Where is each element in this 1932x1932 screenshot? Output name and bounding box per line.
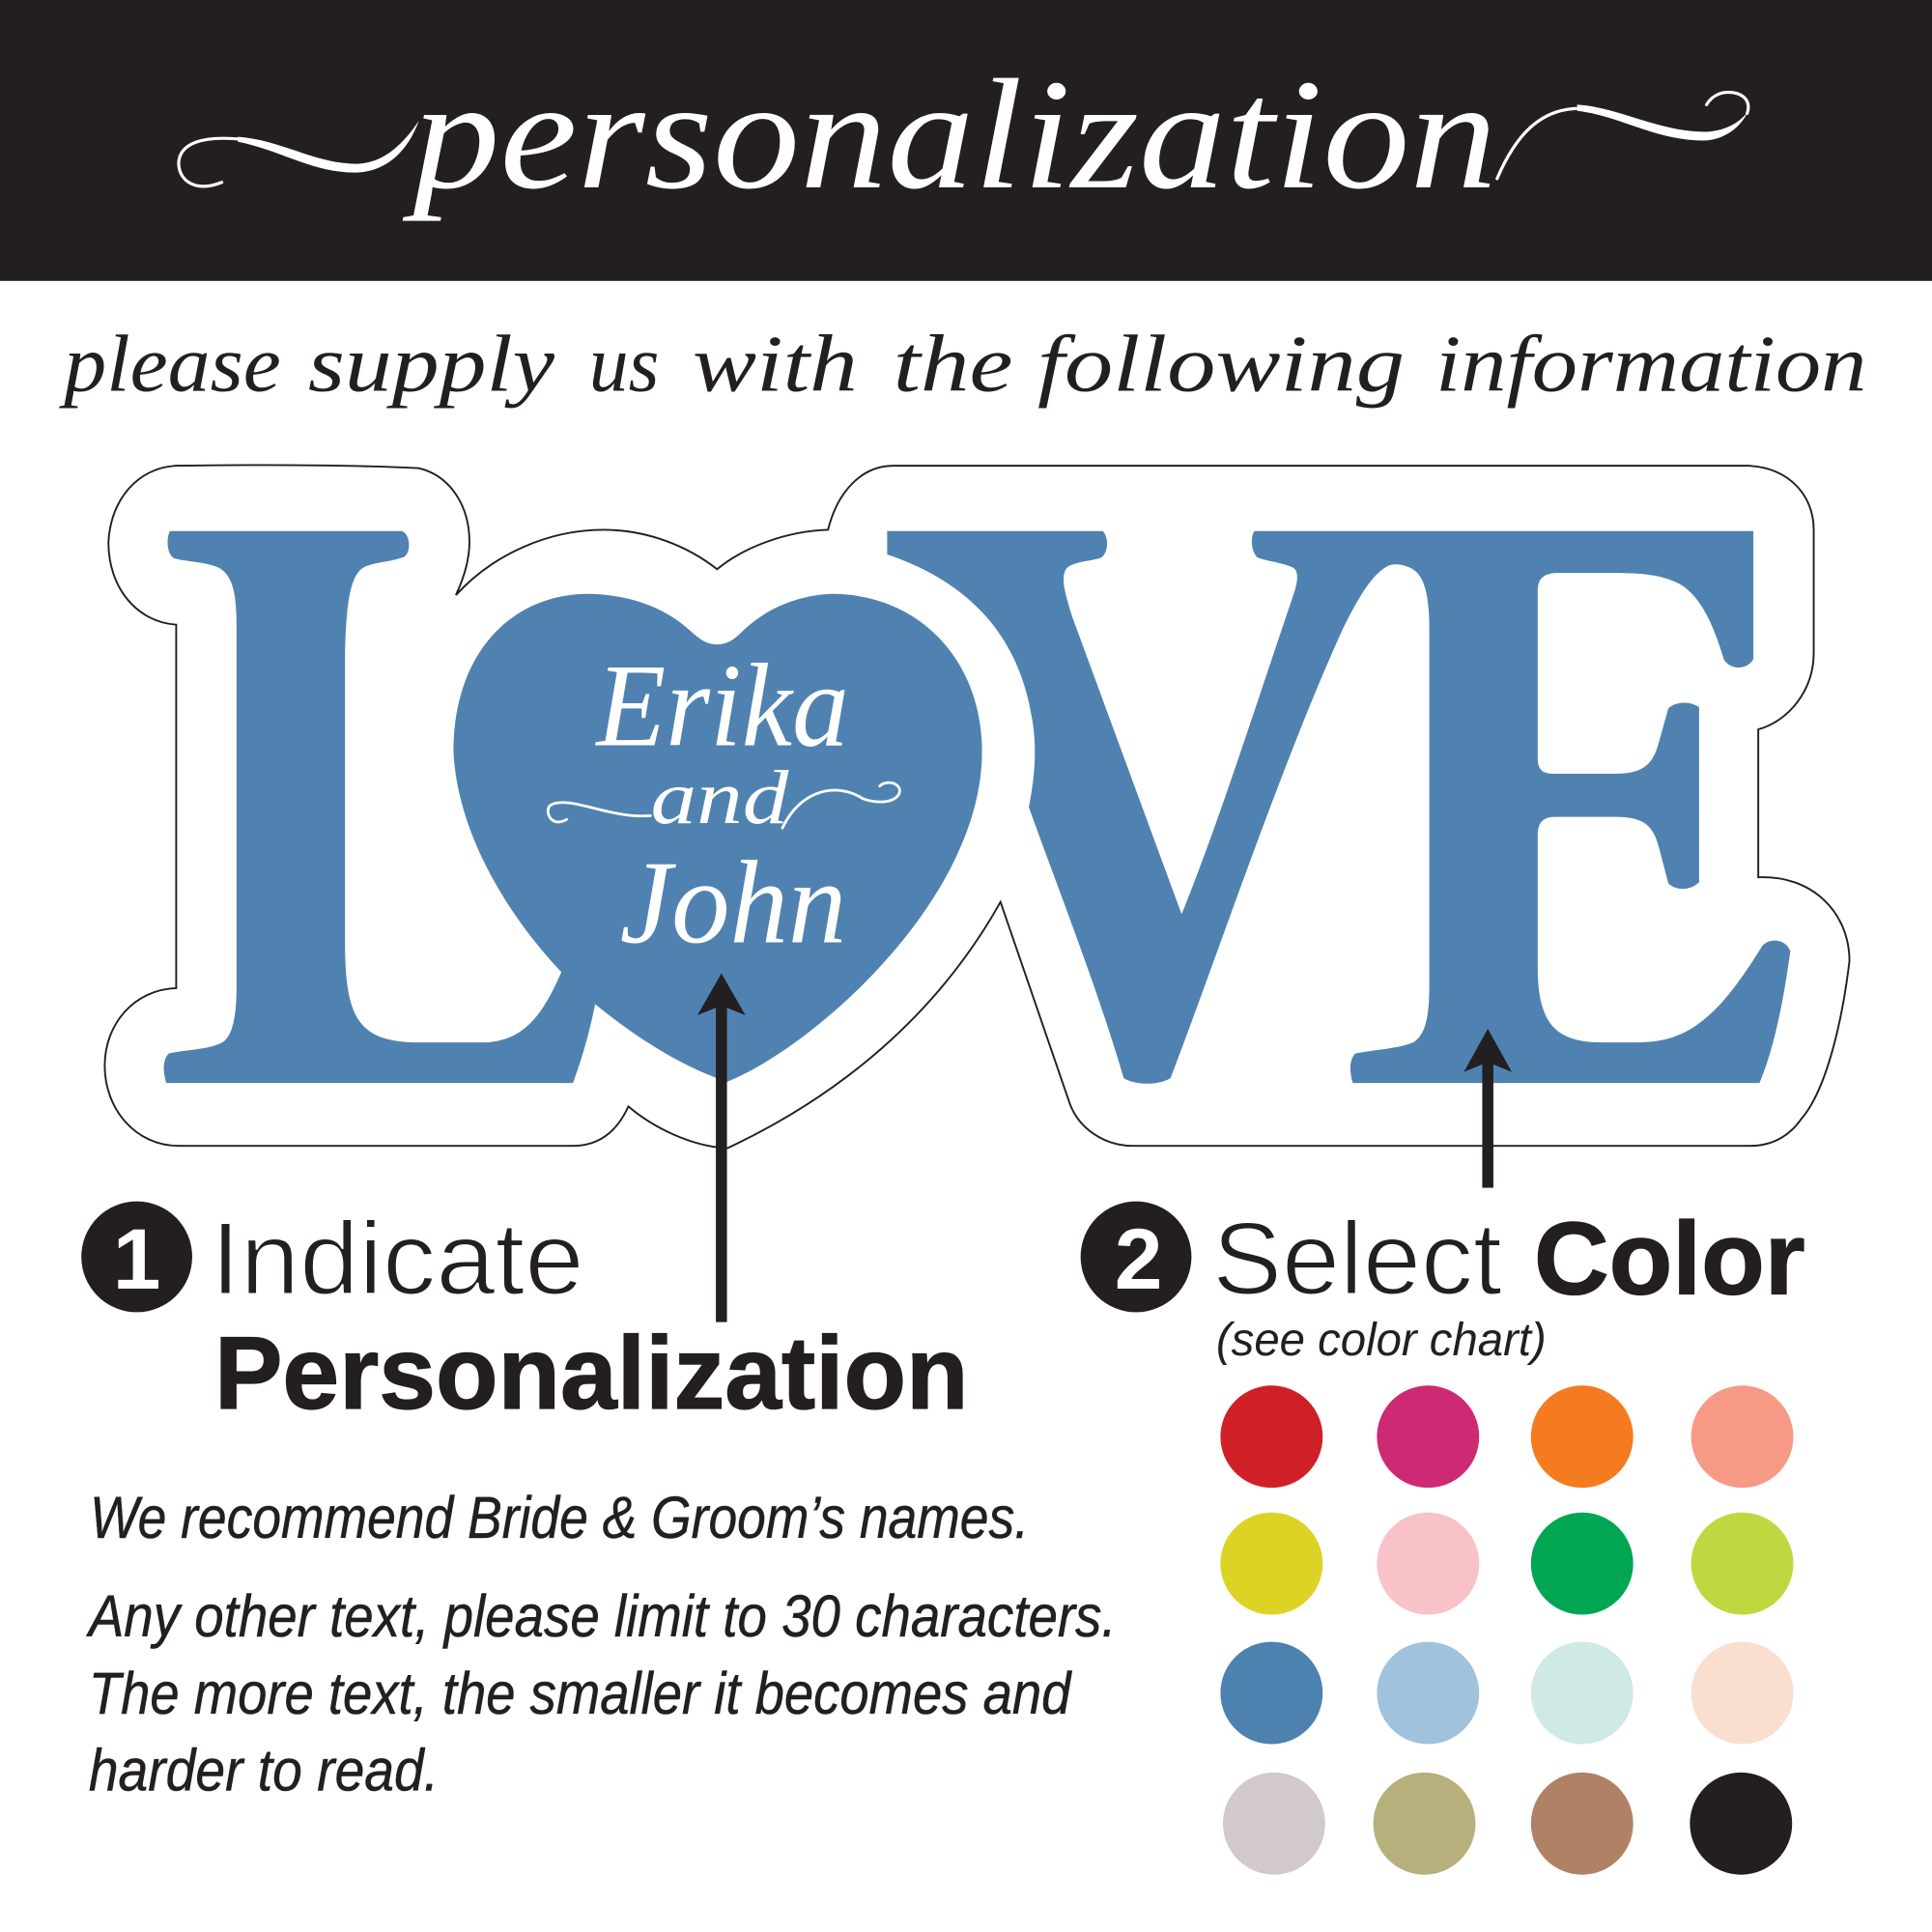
- subtitle: us: [589, 319, 659, 409]
- step 2 badge: [1081, 1202, 1191, 1312]
- step 2 heading: [1212, 1200, 1805, 1316]
- instructions text: [85, 1485, 1117, 1803]
- name: and: and: [650, 756, 789, 840]
- instructions text: We recommend Bride & Groom’s names.: [90, 1485, 1029, 1550]
- step 1 heading: Indicate: [211, 1200, 584, 1316]
- name: Erika: Erika: [594, 641, 849, 772]
- heart with names: [453, 594, 982, 1082]
- step 1 badge: [81, 1202, 192, 1312]
- step 2 badge: 2: [1115, 1210, 1162, 1307]
- instructions text: The more text, the smaller it becomes and: [89, 1661, 1072, 1726]
- header banner: [0, 0, 1932, 281]
- letter L: [164, 531, 595, 1083]
- step 1 badge: 1: [113, 1210, 160, 1307]
- subtitle: please: [59, 319, 281, 409]
- title: [179, 48, 1748, 222]
- instructions text: Any other text, please limit to 30 characters.: [85, 1583, 1117, 1649]
- subtitle: information: [1435, 319, 1866, 409]
- subtitle: with: [693, 319, 858, 409]
- subtitle: supply: [308, 319, 555, 409]
- swashes around and: [548, 782, 899, 828]
- step 1 heading: [211, 1200, 969, 1431]
- subtitle: the: [894, 319, 1012, 409]
- instructions text: harder to read.: [89, 1737, 439, 1803]
- color chart note: (see color chart): [1216, 1314, 1547, 1366]
- step 2 heading: Select: [1212, 1200, 1502, 1316]
- arrow to letters: [1463, 1029, 1512, 1188]
- step 2 heading: Color: [1534, 1200, 1805, 1316]
- letters VE: [887, 531, 1790, 1084]
- subtitle: [59, 319, 1866, 409]
- subtitle: following: [1037, 319, 1405, 409]
- die-cut outline: [104, 465, 1850, 1149]
- step 1 heading: Personalization: [214, 1315, 969, 1431]
- arrow to heart: [697, 974, 746, 1322]
- name: John: John: [620, 838, 846, 969]
- color swatches: [1220, 1385, 1794, 1875]
- title: personalization: [402, 48, 1497, 222]
